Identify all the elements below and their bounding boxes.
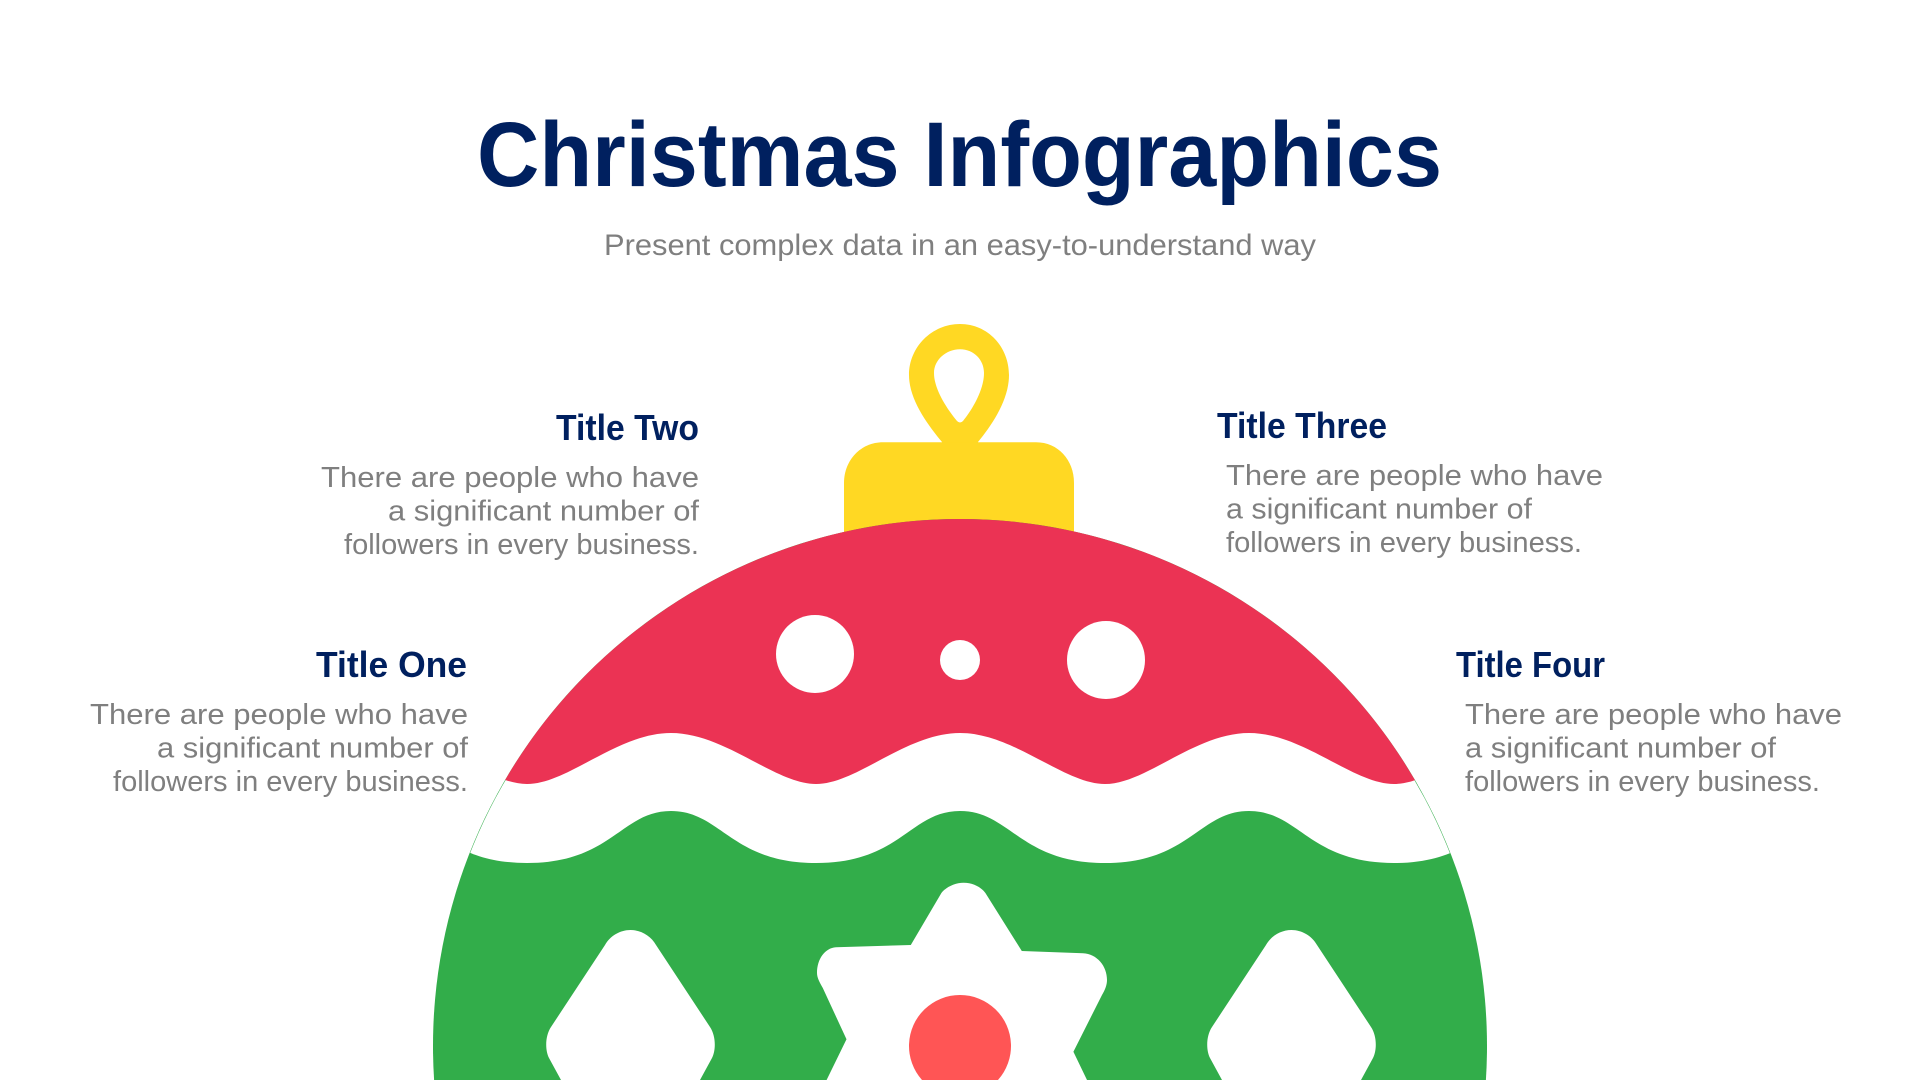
callout: Title Three: Title Three [1217, 405, 1387, 446]
callout: Title Four: a significant number of [1465, 732, 1777, 764]
icon: ornament cap [844, 442, 1074, 545]
callout: Title Three: followers in every business. [1226, 527, 1582, 559]
callout: Title Two [321, 407, 700, 561]
left diamond [546, 930, 715, 1080]
center red circle [909, 995, 1011, 1080]
callout: Title Four: There are people who have [1465, 699, 1842, 731]
right diamond [1207, 930, 1376, 1080]
callout: Title Four: followers in every business. [1465, 766, 1820, 798]
center star [817, 883, 1107, 1080]
callout: Title Two: There are people who have [321, 462, 699, 494]
callout: Title One: There are people who have [90, 699, 468, 731]
title: Christmas Infographics [477, 104, 1442, 206]
icon: ornament hook [909, 324, 1009, 446]
ornament ball [433, 519, 1487, 1080]
callout: Title Two: followers in every business. [344, 529, 699, 561]
callout: Title One: Title One [316, 644, 467, 685]
callout: Title Four [1456, 644, 1842, 798]
callout: Title One: a significant number of [157, 732, 469, 764]
callout: Title Three: a significant number of [1226, 494, 1533, 526]
red upper section [505, 519, 1416, 784]
callout: Title One [90, 644, 469, 798]
ornament [382, 324, 1538, 1080]
white wave band [470, 733, 1450, 863]
green lower section [433, 519, 1487, 1080]
red dots [776, 615, 1145, 699]
subtitle: Present complex data in an easy-to-understand way [604, 229, 1316, 262]
callout: Title Four: Title Four [1456, 644, 1605, 685]
callout: Title One: followers in every business. [113, 766, 468, 798]
callout: Title Three: There are people who have [1226, 460, 1603, 492]
callout: Title Two: a significant number of [388, 496, 700, 528]
callout: Title Three [1217, 405, 1603, 559]
callout: Title Two: Title Two [556, 407, 699, 448]
